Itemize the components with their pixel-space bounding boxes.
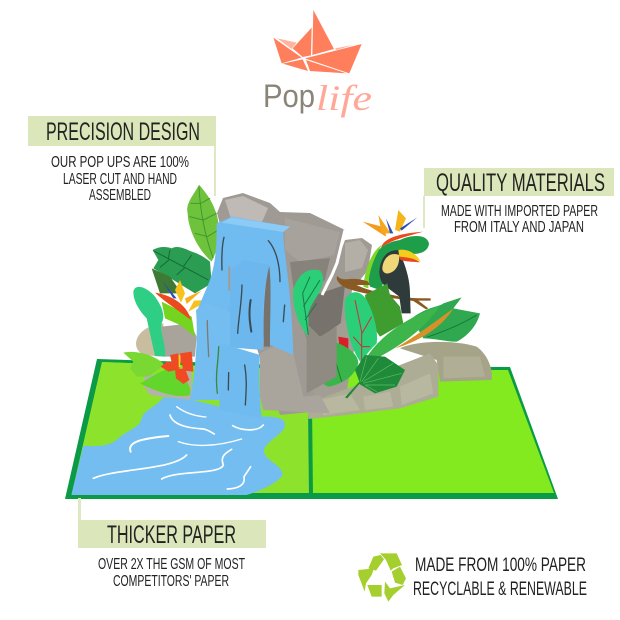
- top fold: [222, 217, 290, 232]
- logo: life: [316, 78, 372, 118]
- back rocks: [217, 193, 372, 415]
- label: precision design: OUR POP UPS ARE 100%: [51, 154, 189, 171]
- fan palm: [345, 355, 405, 398]
- middle rocks and mint leaf: [260, 270, 337, 413]
- bottom tier: [218, 343, 262, 418]
- label: precision design: LASER CUT AND HAND: [63, 171, 177, 188]
- fern leaf: [187, 185, 219, 262]
- left monstera: [313, 342, 358, 387]
- right foliage and toucan: [313, 210, 480, 398]
- lower tier: [190, 303, 230, 400]
- label: thicker paper: OVER 2X THE GSM OF MOST: [98, 556, 245, 573]
- long leaf: [363, 306, 440, 365]
- right rear rock and front rock: [307, 342, 492, 419]
- left rocks: [136, 323, 197, 400]
- waterfall: [190, 217, 293, 418]
- label: precision design: ASSEMBLED: [89, 187, 151, 204]
- dark green leaf: [365, 283, 403, 337]
- text: recycled paper note: [413, 555, 587, 600]
- bird of paradise flower: [363, 210, 423, 248]
- toucan: [379, 250, 421, 313]
- monstera dark: [153, 247, 212, 293]
- red flower: [338, 337, 348, 353]
- label: precision design: [28, 116, 216, 204]
- label: thicker paper: [78, 498, 266, 590]
- hibiscus: [161, 352, 193, 384]
- left foliage: [123, 185, 219, 396]
- label: quality materials: [423, 168, 614, 236]
- logo: [263, 10, 372, 118]
- mint leaf: [133, 287, 165, 357]
- label: thicker paper: COMPETITORS' PAPER: [113, 573, 229, 590]
- top tier: [197, 217, 293, 355]
- lower leaves: [123, 352, 163, 377]
- cut slits: [207, 237, 285, 405]
- bird of paradise: [155, 280, 209, 320]
- orange leaf: [395, 308, 453, 348]
- middle tier: [220, 260, 269, 350]
- right monstera: [412, 297, 480, 342]
- arch opening: [264, 266, 271, 347]
- water pool: [71, 397, 285, 495]
- branch: [337, 276, 431, 309]
- label: precision design: PRECISION DESIGN: [46, 118, 200, 146]
- pop-up card base: [65, 359, 558, 499]
- lime leaf: [162, 302, 195, 337]
- icon: recycle: [358, 553, 406, 602]
- dark leaf: [152, 268, 182, 293]
- mint leaf: [345, 292, 377, 363]
- logo: Pop: [263, 78, 315, 114]
- label: thicker paper: THICKER PAPER: [107, 521, 236, 549]
